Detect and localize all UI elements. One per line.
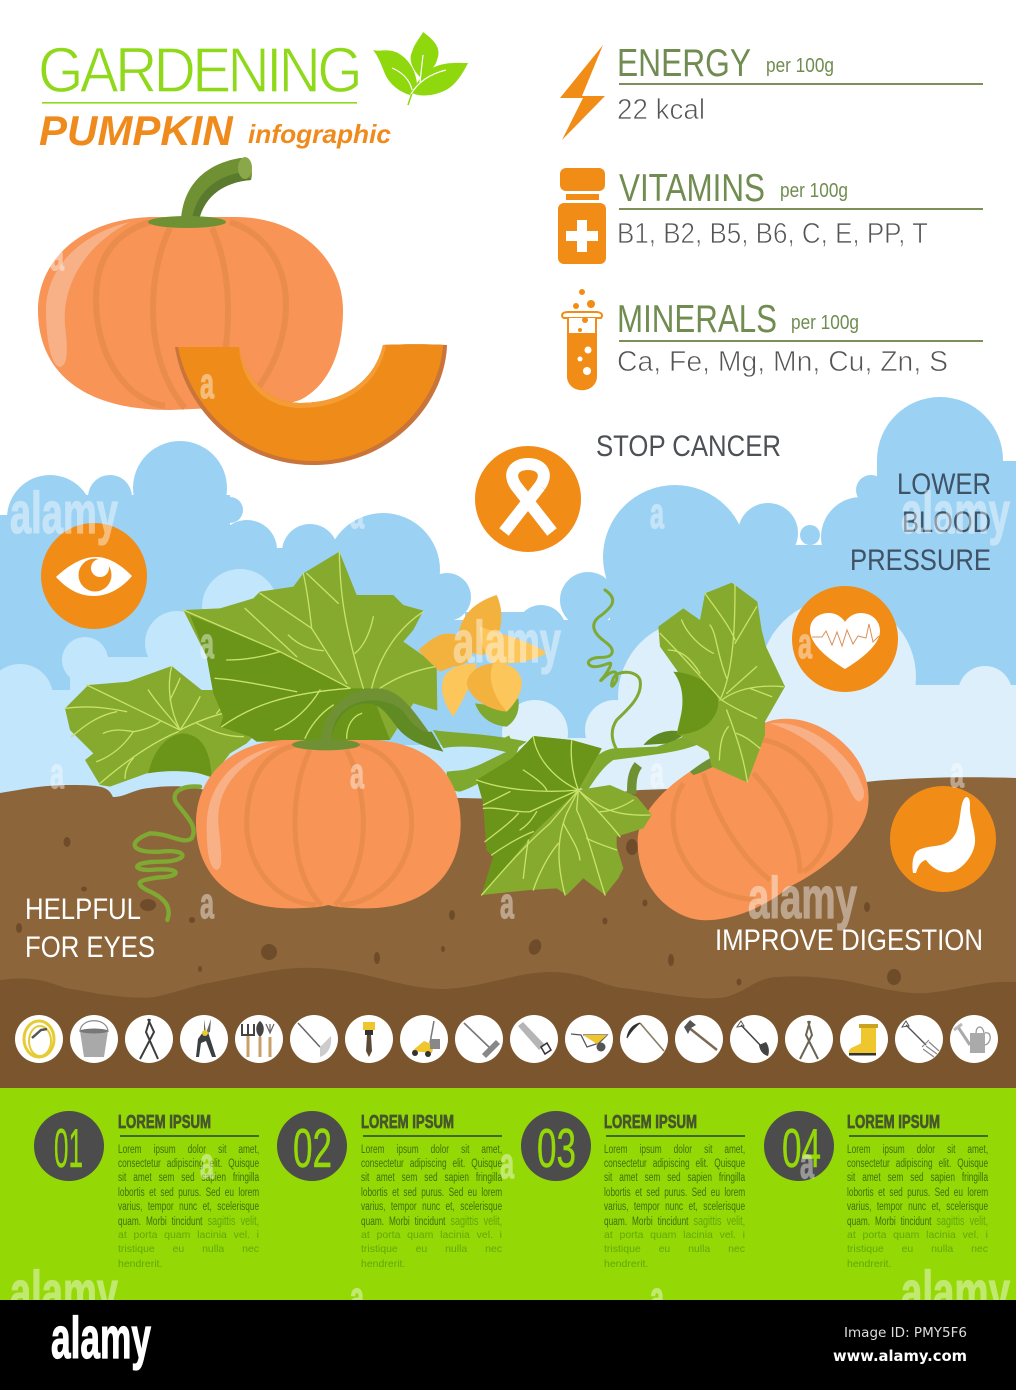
benefit label: helpful for eyes: HELPFUL [25,893,141,926]
step text 1: consectetur adipiscing elit. Quisque [118,1158,259,1170]
tool: bucket [70,1015,118,1063]
nutrition block: vitamins: B1, B2, B5, B6, C, E, PP, T [617,218,928,250]
step text 1 [118,1144,260,1270]
step text 4: varius, tempor nunc et, scelerisque [847,1201,988,1213]
pumpkin body [38,217,343,410]
step text 3: sit amet sem sed sapien fringilla [604,1172,745,1184]
step number 03 [521,1111,591,1181]
alamy watermarks: a [350,489,364,538]
plant left: tendril, leaves and stem [65,552,443,920]
step text 4: lobortis et sed purus. Sed eu lorem [847,1187,988,1199]
nutrition block: energy: ENERGY [617,42,751,85]
step text 3: hendrerit. [604,1258,648,1270]
alamy watermarks: a [50,231,64,280]
step text 2 [361,1144,502,1270]
big pumpkin stem [322,688,443,752]
step text 1: hendrerit. [118,1258,162,1270]
alamy watermarks: a [950,748,964,797]
tool: leaf rake [290,1015,338,1063]
footer image id: Image ID: PMY5F6 [844,1326,967,1341]
subtitle: pumpkin: PUMPKIN [39,107,234,154]
step text 4: Lorem ipsum dolor sit amet, [847,1144,988,1156]
step text 4: quam. Morbi tincidunt sagittis velit, [847,1214,988,1228]
icon: test tube [562,289,602,390]
footer website: www.alamy.com [833,1347,967,1365]
alamy watermarks: a [200,879,214,928]
tool: pruner [180,1015,228,1063]
benefit icon: stomach [890,786,996,892]
step text 1: varius, tempor nunc et, scelerisque [118,1201,259,1213]
step heading 3: LOREM IPSUM [604,1112,697,1132]
tool: rubber boot [840,1015,888,1063]
vines [433,730,527,792]
benefit label: lower blood pressure: PRESSURE [850,544,991,577]
step text 3: tristique eu nulla nec [604,1243,745,1255]
step text 2: at porta quam lacinia vel. i [361,1229,502,1241]
tool: scythe [620,1015,668,1063]
step text 3: varius, tempor nunc et, scelerisque [604,1201,745,1213]
benefit label: lower blood pressure: LOWER [897,468,991,501]
tool: wheelbarrow [565,1015,613,1063]
step text 1: sit amet sem sed sapien fringilla [118,1172,259,1184]
alamy watermarks: a [200,1139,214,1188]
black footer bar [0,1300,1016,1390]
step text 2: varius, tempor nunc et, scelerisque [361,1201,502,1213]
alamy watermarks: a [350,1273,364,1322]
left tendril [135,786,200,920]
step number 02: 02 [293,1117,332,1179]
step number 01: 01 [54,1117,83,1179]
subtitle: infographic: infographic [248,119,392,149]
nutrition block: vitamins [558,167,983,264]
tool: brush [345,1015,393,1063]
step text 3: lobortis et sed purus. Sed eu lorem [604,1187,745,1199]
benefit label: helpful for eyes [25,893,155,964]
soil ground [0,777,1016,1090]
step text 4: consectetur adipiscing elit. Quisque [847,1158,988,1170]
nutrition block: minerals: per 100g [791,312,859,334]
tool: hedge shears [785,1015,833,1063]
right leaf [658,583,785,782]
alamy watermarks: a [200,619,214,668]
alamy watermarks: a [650,748,664,797]
step text 1: tristique eu nulla nec [118,1243,259,1255]
benefit icon: eye [41,523,147,629]
pumpkin slice [175,344,447,465]
step text 4: sit amet sem sed sapien fringilla [847,1172,988,1184]
center leaf [477,736,652,895]
benefit icon: ribbon [475,446,581,552]
tool: spade [730,1015,778,1063]
step text 2: hendrerit. [361,1258,405,1270]
nutrition block: energy: per 100g [766,55,834,77]
alamy watermarks: a [500,1139,514,1188]
icon: leaves [373,32,468,105]
small left leaf [65,666,253,787]
main stalk [578,713,723,792]
tool: loppers [125,1015,173,1063]
nutrition block: minerals: MINERALS [617,298,777,341]
step text 3: quam. Morbi tincidunt sagittis velit, [604,1214,745,1228]
step text 1: Lorem ipsum dolor sit amet, [118,1144,259,1156]
step text 3: consectetur adipiscing elit. Quisque [604,1158,745,1170]
step text 3 [604,1144,746,1270]
tool: watering can [950,1015,998,1063]
step heading 1: LOREM IPSUM [118,1112,211,1132]
title underline [42,102,357,104]
alamy watermarks: a [800,1139,814,1188]
dark lower soil band [0,968,1016,1090]
benefit label: helpful for eyes: FOR EYES [25,931,155,964]
tool: saw [510,1015,558,1063]
step number 01 [34,1111,104,1181]
step text 1: quam. Morbi tincidunt sagittis velit, [118,1214,259,1228]
step heading 4: LOREM IPSUM [847,1112,940,1132]
nutrition block: vitamins: VITAMINS [619,167,765,210]
icon: vitamin bottle [558,168,606,264]
nutrition block: energy [560,42,983,140]
alamy watermarks [10,231,1010,1325]
sky and clouds [0,397,1016,810]
step text 4: hendrerit. [847,1258,891,1270]
step number 02 [277,1111,347,1181]
pumpkin flower [418,595,547,750]
step number 03: 03 [537,1117,576,1179]
alamy watermarks: a [200,359,214,408]
tool: hose [15,1015,63,1063]
step text 4 [847,1144,988,1270]
alamy watermarks: a [650,1273,664,1322]
step text 2: Lorem ipsum dolor sit amet, [361,1144,502,1156]
nutrition block: minerals: Ca, Fe, Mg, Mn, Cu, Zn, S [617,346,948,378]
big leaf [183,552,437,742]
alamy watermarks: a [798,619,812,668]
tool: lawn mower [400,1015,448,1063]
step number 04 [764,1111,834,1181]
step number 04: 04 [782,1117,821,1179]
step text 2: quam. Morbi tincidunt sagittis velit, [361,1214,502,1228]
alamy watermarks: a [500,879,514,928]
whole pumpkin [38,157,343,410]
tool: axe [675,1015,723,1063]
step text 2: consectetur adipiscing elit. Quisque [361,1158,502,1170]
front big pumpkin [196,739,461,908]
soil stones [16,837,901,986]
tool: hand tools [235,1015,283,1063]
alamy watermarks: alamy [748,866,857,931]
step text 1: lobortis et sed purus. Sed eu lorem [118,1187,259,1199]
alamy watermarks: a [350,749,364,798]
alamy watermarks: a [650,489,664,538]
step text 4: tristique eu nulla nec [847,1243,988,1255]
footer logo: alamy [51,1306,151,1371]
nutrition block: minerals [562,289,983,390]
pumpkin stem [181,158,252,220]
step text 2: sit amet sem sed sapien fringilla [361,1172,502,1184]
benefit label: lower blood pressure: BLOOD [902,506,991,539]
green footer panel [0,1088,1016,1300]
title: gardening: GARDENING [38,34,359,106]
tilted right pumpkin [638,719,869,920]
alamy watermarks: alamy [10,481,118,546]
alamy watermarks: alamy [10,1260,118,1325]
back stems [632,731,687,794]
step heading 2: LOREM IPSUM [361,1112,454,1132]
step text 3: Lorem ipsum dolor sit amet, [604,1144,745,1156]
tool: garden fork [895,1015,943,1063]
step text 1: at porta quam lacinia vel. i [118,1229,259,1241]
nutrition block: energy: 22 kcal [617,94,705,126]
tool: garden rake [455,1015,503,1063]
step text 2: tristique eu nulla nec [361,1243,502,1255]
alamy watermarks: alamy [453,610,561,675]
step text 4: at porta quam lacinia vel. i [847,1229,988,1241]
benefit label: stop cancer: STOP CANCER [596,430,781,463]
icon: lightning bolt [560,45,605,140]
garden tool icon row [15,1015,998,1063]
benefit icon: heart [792,586,898,692]
step text 3: at porta quam lacinia vel. i [604,1229,745,1241]
plant right: vines, pumpkin, leaves [433,583,869,920]
benefit label: lower blood pressure [850,468,991,577]
nutrition block: vitamins: per 100g [780,180,848,202]
right tendril [588,590,640,748]
step text 2: lobortis et sed purus. Sed eu lorem [361,1187,502,1199]
alamy watermarks: a [50,749,64,798]
